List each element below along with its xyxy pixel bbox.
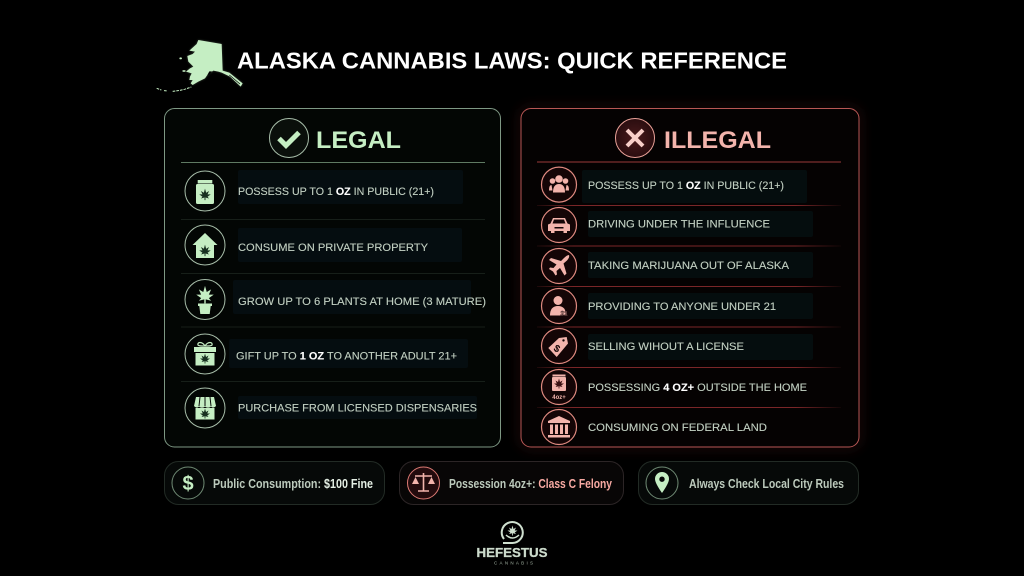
illegal header: ILLEGAL: [664, 127, 771, 154]
row: taking out of Alaska: [542, 248, 813, 284]
pill: public consumption fine: [164, 462, 384, 504]
logo: Hefestus Cannabis: HEFESTUS: [476, 545, 548, 560]
row: possess: POSSESS UP TO 1 OZ IN PUBLIC (21+): [238, 186, 434, 198]
row: possessing 4oz: 4oz+: [552, 395, 566, 401]
row: consume: CONSUME ON PRIVATE PROPERTY: [238, 242, 429, 254]
row: selling: $: [551, 343, 562, 356]
row: possess: [185, 170, 463, 211]
logo: Hefestus Cannabis: CANNABIS: [494, 560, 533, 566]
row: providing: [542, 288, 813, 324]
pill: possession felony: Possession 4oz+: Class C Felony: [449, 477, 612, 491]
legal header: LEGAL: [316, 127, 401, 154]
panel: illegal: [521, 108, 859, 447]
pill: local rules: [638, 462, 858, 504]
pill: public consumption fine: Public Consumption: $100 Fine: [213, 477, 373, 491]
row: taking out of Alaska: TAKING MARIJUANA OUT OF ALASKA: [588, 260, 790, 272]
row: possessing 4oz: POSSESSING 4 OZ+ OUTSIDE THE HOME: [588, 382, 807, 394]
row: consume: [185, 225, 462, 265]
icon: Alaska map: [157, 40, 243, 91]
row: federal land: CONSUMING ON FEDERAL LAND: [588, 422, 767, 434]
row: possessing 4oz: [542, 370, 807, 404]
pill: local rules: Always Check Local City Rules: [689, 477, 844, 491]
row: providing: PROVIDING TO ANYONE UNDER 21: [588, 301, 776, 313]
row: driving: [542, 208, 813, 242]
row: grow: GROW UP TO 6 PLANTS AT HOME (3 MATURE): [238, 296, 486, 308]
legal header: [270, 118, 401, 158]
pill: possession felony: [400, 462, 624, 504]
row: driving: DRIVING UNDER THE INFLUENCE: [588, 218, 770, 230]
row: selling: SELLING WIHOUT A LICENSE: [588, 341, 744, 353]
row: purchase: PURCHASE FROM LICENSED DISPENSARIES: [238, 402, 477, 414]
illegal header: [616, 118, 771, 158]
row: purchase: [185, 388, 477, 428]
row: public possession: [542, 167, 807, 203]
row: gift: GIFT UP TO 1 OZ TO ANOTHER ADULT 21+: [236, 351, 457, 363]
logo: Hefestus Cannabis: [476, 522, 548, 566]
pill: public consumption fine: $: [182, 473, 194, 495]
row: gift: [185, 334, 468, 374]
row: grow: [185, 280, 486, 320]
row: selling: [542, 328, 813, 364]
panel: legal: [164, 108, 500, 447]
row: providing: 21: [560, 310, 568, 318]
row: public possession: POSSESS UP TO 1 OZ IN PUBLIC (21+): [588, 180, 784, 192]
row: federal land: [542, 410, 767, 444]
title: ALASKA CANNABIS LAWS: QUICK REFERENCE: [237, 48, 787, 74]
